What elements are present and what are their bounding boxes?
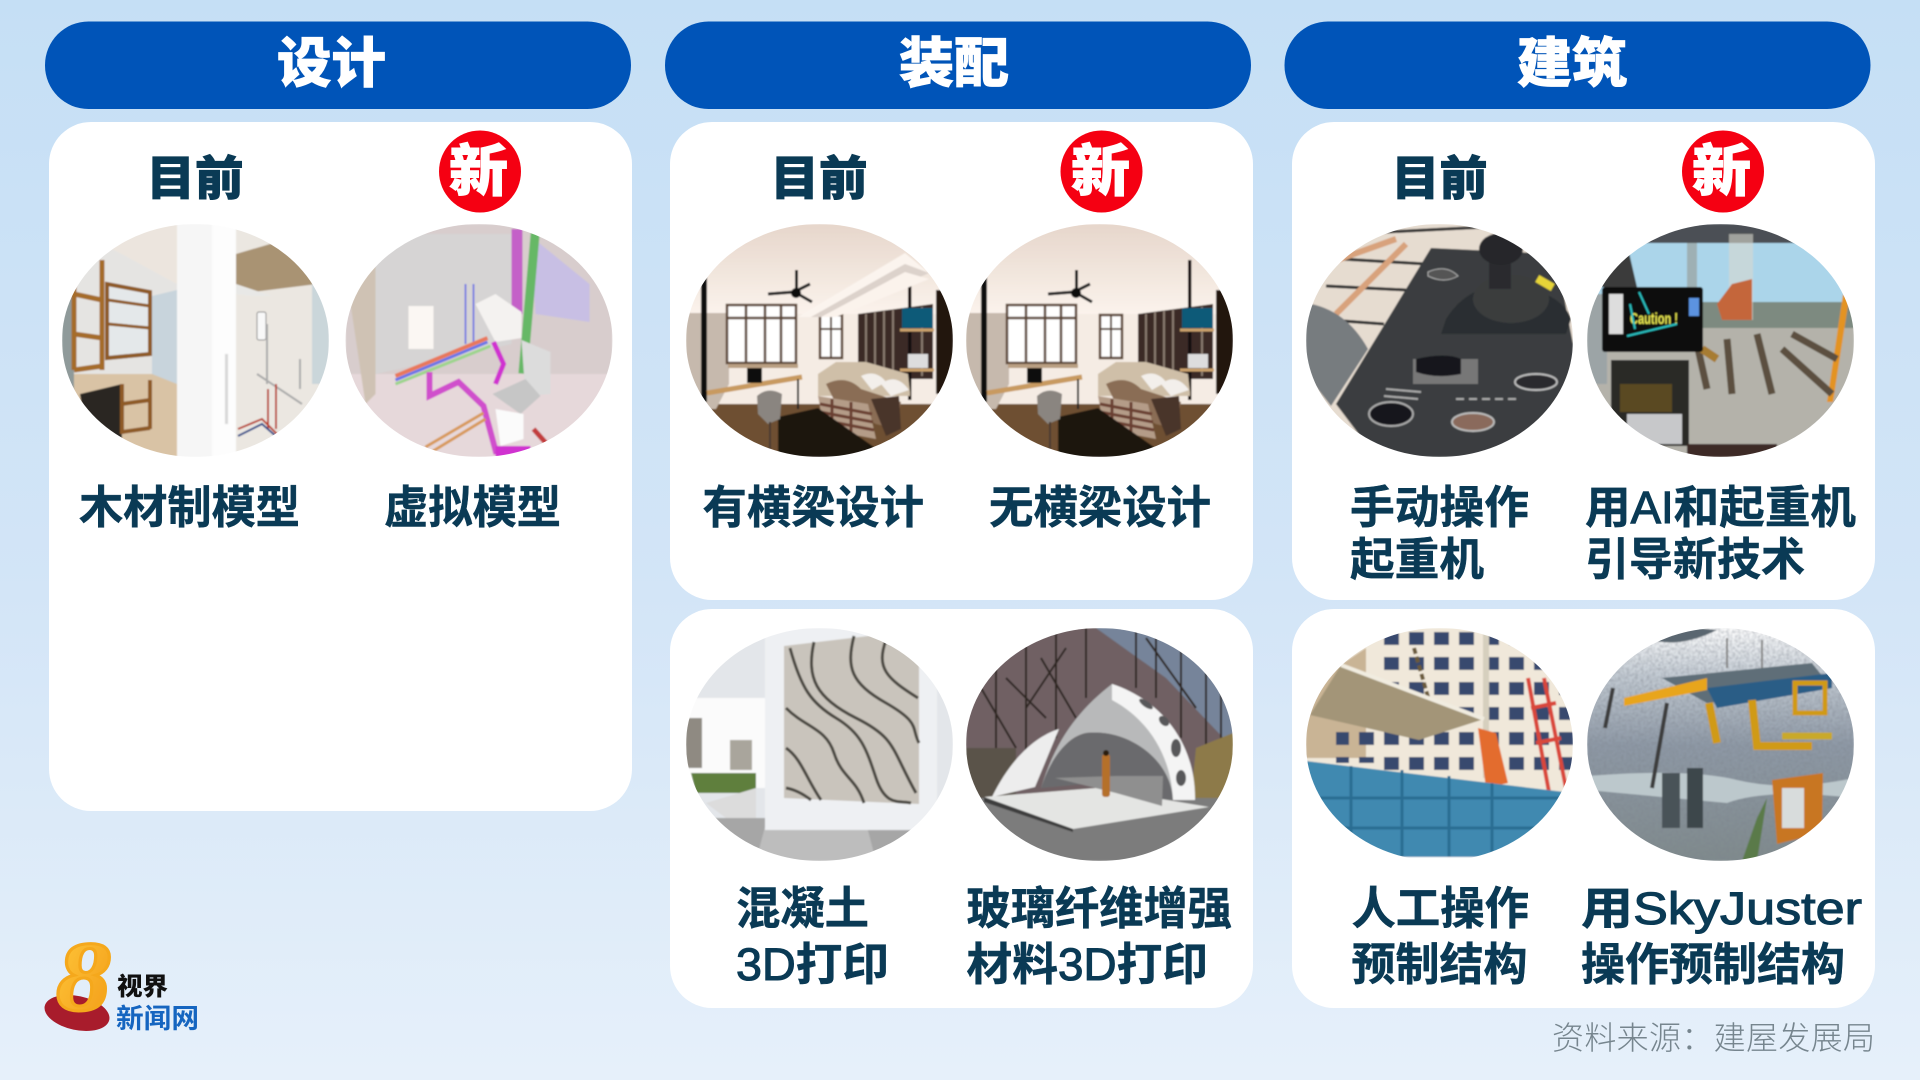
source note: 资料来源：建屋发展局 [1552, 1020, 1875, 1056]
photo: virtual model [346, 224, 612, 457]
label: manual precast [1352, 883, 1529, 990]
photo: fibre reinforced 3D printed shelter [966, 628, 1233, 861]
badge: new [1060, 130, 1142, 212]
badge: new [439, 130, 521, 212]
label: concrete 3D printing: 混凝土 [736, 883, 869, 934]
panel: construction top [1292, 122, 1875, 600]
logo: channel 8 [41, 921, 199, 1036]
heading: current: 目前 [1392, 152, 1488, 205]
photo: concrete 3D printed wall [686, 628, 953, 861]
label: AI crane guidance: 引导新技术 [1585, 534, 1805, 585]
heading: current: 目前 [146, 152, 244, 205]
label: SkyJuster precast: 操作预制结构 [1581, 939, 1845, 990]
header: 设计 [45, 22, 631, 109]
text: caution: Caution ! [1630, 311, 1678, 328]
photo: bedroom with beam [686, 224, 953, 457]
label: manual crane: 手动操作 [1350, 482, 1529, 533]
panel: design [49, 122, 632, 811]
label: AI crane guidance: 用AI和起重机 [1585, 482, 1856, 533]
label: fibre reinforced 3D printing: 玻璃纤维增强 [966, 883, 1232, 934]
header: 设计: 设计 [277, 34, 386, 94]
panel: assembly top [670, 122, 1253, 600]
label: manual precast: 人工操作 [1352, 883, 1529, 934]
label: manual crane: 起重机 [1350, 534, 1484, 585]
badge: new [1682, 130, 1764, 212]
label: SkyJuster precast: 用SkyJuster [1581, 883, 1862, 934]
label: manual precast: 预制结构 [1352, 939, 1528, 990]
label: SkyJuster precast [1581, 883, 1862, 990]
label: concrete 3D printing: 3D打印 [736, 939, 889, 990]
label: fibre reinforced 3D printing [966, 883, 1232, 990]
label: no beam design: 无横梁设计 [989, 482, 1211, 533]
badge: new: 新 [1071, 140, 1130, 203]
photo: manual crane controls [1306, 224, 1573, 457]
logo text: 视界 [117, 973, 168, 1001]
photo: SkyJuster lifting [1587, 628, 1854, 861]
label: wooden model: 木材制模型 [79, 482, 300, 533]
photo: manual precast lifting [1306, 628, 1573, 861]
logo text: 新闻网 [116, 1004, 199, 1034]
heading: current: 目前 [770, 152, 868, 205]
logo text [116, 973, 199, 1034]
label: virtual model: 虚拟模型 [384, 482, 561, 533]
header: 建筑: 建筑 [1517, 34, 1627, 94]
label: with beam design: 有横梁设计 [702, 482, 924, 533]
panel: assembly bottom [670, 609, 1253, 1008]
header: 装配: 装配 [899, 34, 1009, 94]
label: concrete 3D printing [736, 883, 889, 990]
panel: construction bottom [1292, 609, 1875, 1008]
badge: new: 新 [1692, 140, 1751, 203]
label: AI crane guidance [1585, 482, 1856, 585]
header: 建筑 [1284, 22, 1870, 109]
badge: new: 新 [449, 140, 508, 203]
label: manual crane [1350, 482, 1529, 585]
logo mark: 8 [56, 921, 111, 1032]
label: fibre reinforced 3D printing: 材料3D打印 [966, 939, 1208, 990]
photo: AI crane cab [1587, 224, 1854, 457]
photo: bedroom without beam [966, 224, 1233, 457]
photo: wooden mock-up [62, 224, 329, 457]
header: 装配 [665, 22, 1251, 109]
